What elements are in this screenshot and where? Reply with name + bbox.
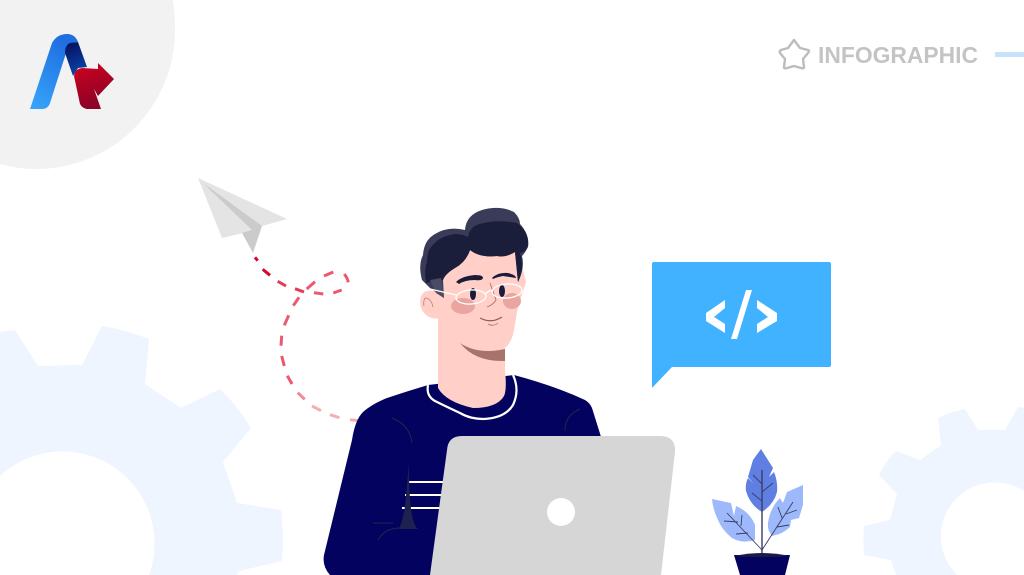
ear bbox=[420, 291, 440, 319]
plant stems bbox=[724, 470, 797, 553]
hair back bbox=[420, 208, 528, 298]
sweater fold details bbox=[373, 409, 580, 540]
hair front bbox=[425, 221, 528, 283]
code symbol bbox=[706, 290, 777, 339]
header label: INFOGRAPHIC text: INFOGRAPHIC bbox=[818, 42, 978, 68]
mouth bbox=[480, 317, 502, 321]
header accent dash bbox=[995, 52, 1024, 57]
leaf: center bbox=[746, 449, 777, 512]
header label: star icon bbox=[780, 40, 809, 68]
collar bbox=[428, 375, 516, 419]
leaf: left bbox=[712, 499, 755, 542]
glasses bbox=[430, 283, 522, 305]
laptop bbox=[430, 436, 675, 575]
arm shadow bbox=[399, 463, 418, 529]
blush bbox=[451, 298, 475, 314]
background gear: right bbox=[864, 407, 1024, 575]
jaw shadow bbox=[460, 343, 505, 361]
leaf: right bbox=[768, 485, 803, 536]
logo: blue and red arrow mark bbox=[30, 34, 114, 109]
speech bubble with code symbol bbox=[652, 262, 831, 388]
paper plane bbox=[198, 178, 287, 253]
dashed flight path bbox=[255, 257, 360, 421]
person bbox=[324, 208, 640, 575]
sweater bbox=[324, 375, 640, 575]
sideburn bbox=[430, 278, 444, 298]
sweater stripes bbox=[402, 481, 448, 509]
eyes bbox=[470, 288, 476, 300]
neck and face skin bbox=[436, 240, 526, 408]
background gear: left bbox=[0, 326, 283, 575]
potted plant bbox=[712, 449, 803, 575]
pot bbox=[734, 555, 790, 575]
eyebrows bbox=[456, 275, 483, 284]
nose bbox=[487, 283, 496, 307]
logo backdrop circle bbox=[0, 0, 175, 169]
laptop logo bbox=[547, 498, 575, 526]
